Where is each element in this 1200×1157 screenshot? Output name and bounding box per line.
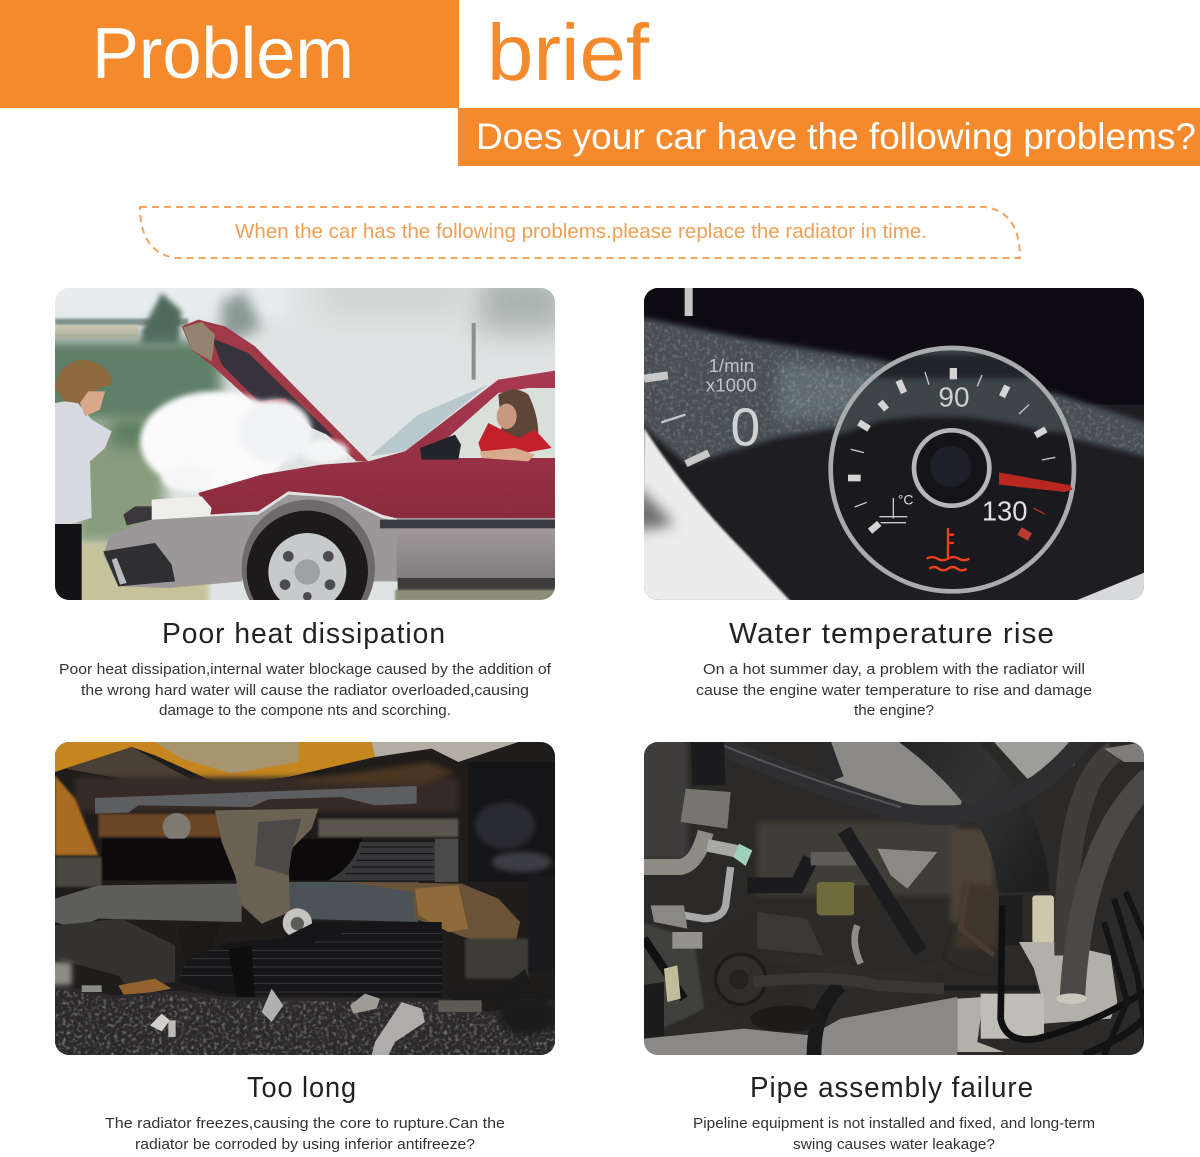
dashed callout: [140, 207, 1020, 258]
text: Too long description: radiator be corroded by using inferior antifreeze?: [135, 1136, 475, 1153]
text: Poor heat dissipation description: damage to the compone nts and scorching.: [159, 702, 451, 719]
small black hose: [747, 859, 811, 885]
icon: warning thermometer: [927, 528, 969, 570]
heading: Too long: Too long: [247, 1072, 357, 1104]
photo: temperature gauge: x1000: [706, 374, 757, 395]
solenoid: [817, 882, 855, 915]
subtitle banner: Does your car have the following problems?: [476, 116, 1196, 157]
windshield: [370, 385, 488, 456]
wheel: [242, 500, 375, 600]
right wires: [1104, 892, 1147, 1055]
hood: [182, 320, 368, 461]
text: Water temperature rise description: the engine?: [854, 702, 934, 719]
ash floor: [55, 985, 555, 1057]
photo: temperature gauge: [634, 288, 1151, 601]
left rust: [55, 775, 98, 855]
big hose: [911, 719, 1024, 892]
text: Water temperature rise description: cause the engine water temperature to rise and damage: [696, 682, 1092, 699]
white bezel: [641, 428, 791, 601]
heading: Pipe assembly failure: Pipe assembly failure: [750, 1072, 1034, 1104]
sparkle reflection band: [637, 316, 1151, 465]
radiator core: [178, 922, 442, 997]
cream reservoir: [1032, 895, 1054, 944]
text: Water temperature rise description: On a hot summer day, a problem with the radiator will: [703, 661, 1085, 678]
gauge dial: 130: [982, 496, 1027, 527]
heading: Water temperature rise: Water temperature rise: [729, 618, 1055, 650]
photo: temperature gauge: 1/min: [709, 355, 754, 376]
black loop: [1001, 905, 1147, 1039]
dashed callout: When the car has the following problems.please replace the radiator in time.: [235, 221, 927, 243]
photo: temperature gauge: 0: [730, 398, 760, 457]
girl: [498, 390, 538, 441]
left black hose and connector: [707, 735, 709, 785]
text: Pipe assembly failure description: Pipeline equipment is not installed and fixed, and long-term: [693, 1115, 1095, 1132]
text: Water temperature rise description: [696, 661, 1092, 719]
text: Pipe assembly failure description: [693, 1115, 1095, 1153]
text: Poor heat dissipation description: Poor heat dissipation,internal water blockage caused by the addition of: [59, 661, 552, 678]
rubber hoses: [767, 955, 954, 978]
headlight and grille: [152, 496, 212, 520]
side window: [425, 386, 555, 458]
diagonal hose: [844, 830, 921, 952]
right big hoses: [1066, 752, 1114, 955]
woman: [55, 400, 112, 525]
centre bracket: [215, 809, 318, 924]
filter cap: [700, 909, 818, 1028]
heading: brief: brief: [487, 8, 650, 97]
rust strip: [98, 814, 222, 837]
subtitle banner: [458, 108, 1200, 166]
upper bar: [95, 786, 417, 814]
left lower parts: [55, 857, 102, 887]
photo: overheating car with smoke: [55, 288, 555, 600]
engine block: [757, 822, 957, 895]
top thin hose: [704, 739, 1084, 816]
text: Poor heat dissipation description: [59, 661, 552, 719]
text: Poor heat dissipation description: the wrong hard water will cause the radiator overloaded,causing: [81, 682, 529, 699]
car body: [198, 371, 555, 518]
floor panels: [644, 997, 957, 1057]
text: Too long description: The radiator freezes,causing the core to rupture.Can the: [105, 1115, 505, 1132]
photo: engine bay pipes: [644, 742, 1144, 1055]
main cross bar: [55, 884, 242, 929]
lower body: [103, 495, 398, 588]
black cavity: [102, 839, 362, 880]
lower left debris: [55, 919, 175, 989]
text: Pipe assembly failure description: swing causes water leakage?: [793, 1136, 995, 1153]
header banner: Problem: Problem: [92, 14, 354, 94]
silver pipe: [641, 832, 706, 867]
gauge dial: 90: [938, 381, 970, 412]
photo: burnt radiator: [48, 742, 558, 1057]
alloy bracket: [957, 942, 1117, 1052]
smoke puff: [140, 391, 290, 491]
text: Too long description: [105, 1115, 505, 1153]
heading: Poor heat dissipation: Poor heat dissipation: [162, 618, 446, 650]
gauge dial: [828, 346, 1076, 594]
rusty hood edge: [55, 742, 375, 785]
lower left: [641, 922, 704, 1035]
green cap: [733, 844, 752, 866]
gauge dial: °C: [898, 492, 914, 508]
right machinery: [468, 762, 558, 882]
header banner: Problem: [0, 0, 459, 108]
smoke haze: [478, 275, 565, 331]
